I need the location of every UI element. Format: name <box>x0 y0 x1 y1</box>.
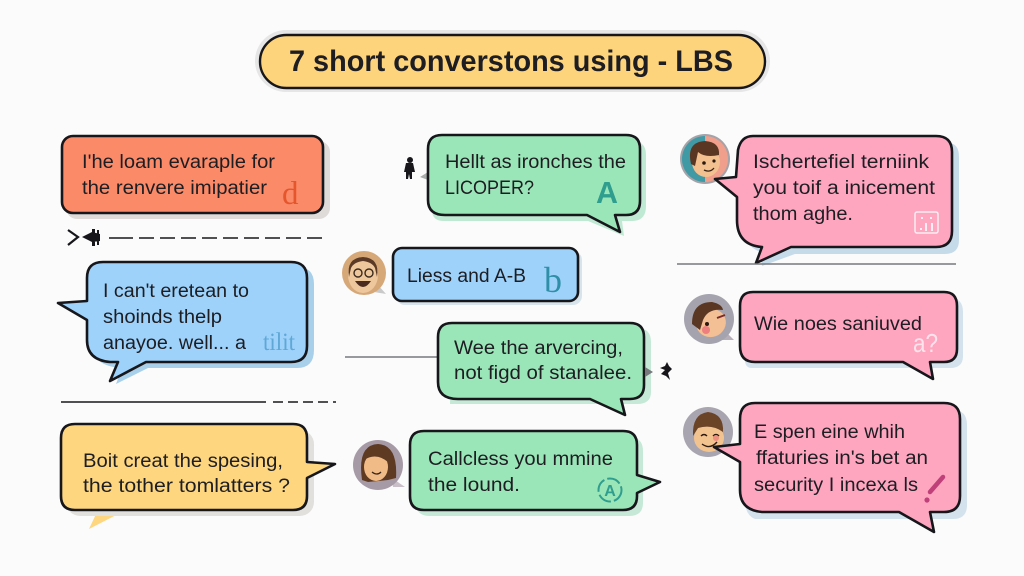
bubble shadow <box>432 141 646 236</box>
panel: pink message three <box>714 403 967 532</box>
panel: green message one: LICOPER? <box>445 178 534 199</box>
icon: circled A <box>598 478 622 502</box>
bubble <box>410 431 660 510</box>
panel: pink message three: E spen eine whih <box>754 422 905 443</box>
panel: blue message: anayoe. well... a <box>103 333 246 354</box>
panel: blue short message: b <box>544 260 562 300</box>
panel: orange message: I'he loam evaraple for <box>82 152 276 173</box>
panel: yellow message <box>61 424 335 529</box>
panel: yellow message: the tother tomlatters ? <box>83 476 290 497</box>
icon: small figure right <box>645 362 672 380</box>
panel: pink message three: ffaturies in's bet an <box>756 448 928 469</box>
panel: pink message one: thom aghe. <box>753 204 853 225</box>
connector line <box>345 356 438 358</box>
panel: orange message <box>62 136 330 219</box>
icon: avatar smiling <box>683 407 733 457</box>
icon: woman avatar <box>353 440 405 490</box>
divider <box>61 401 336 403</box>
title: 7 short converstons using - LBS <box>289 45 733 78</box>
bubble shadow <box>92 267 314 384</box>
panel: blue short message <box>393 248 582 305</box>
panel: orange message: the renvere imipatier <box>82 178 268 199</box>
panel: green message two: Wee the arvercing, <box>454 338 623 359</box>
icon: bald man avatar <box>342 251 386 295</box>
divider with arrow icon <box>68 229 327 246</box>
panel: orange message: d <box>282 176 299 212</box>
panel: green message two: not figd of stanalee. <box>454 363 632 384</box>
panel: blue short message: Liess and A-B <box>407 266 526 287</box>
bubble <box>740 292 957 379</box>
icon: avatar boy <box>680 134 730 184</box>
divider <box>677 263 956 265</box>
panel: pink message one: Ischertefiel terniink <box>753 152 930 173</box>
bubble shadow <box>745 143 959 266</box>
panel: yellow message: Boit creat the spesing, <box>83 451 283 472</box>
panel: green message three <box>410 431 660 516</box>
panel: blue message: tilit <box>263 329 295 356</box>
panel: blue message: I can't eretean to <box>103 281 249 302</box>
tail bottom <box>89 512 122 529</box>
panel: green message two <box>438 323 651 415</box>
panel: pink message two: a? <box>913 328 938 358</box>
icon: pink slash mark <box>924 477 943 503</box>
bubble <box>58 262 307 381</box>
title <box>255 30 770 92</box>
panel: pink message one: you toif a inicement <box>753 178 936 199</box>
panel: pink message two: Wie noes saniuved <box>754 314 922 335</box>
bubble <box>428 135 640 232</box>
panel: green message three: Callcless you mmine <box>428 449 613 470</box>
panel: pink message one <box>715 136 959 266</box>
bubble <box>61 424 335 510</box>
bubble <box>715 136 952 263</box>
icon: circled A: A <box>604 483 616 500</box>
panel: blue message: shoinds thelp <box>103 307 222 328</box>
panel: green message three: the lound. <box>428 475 520 496</box>
bubble <box>438 323 644 415</box>
panel: pink message two <box>740 292 963 379</box>
bubble <box>714 403 960 532</box>
panel: green message one <box>420 135 646 236</box>
icon: avatar blush <box>684 294 734 344</box>
icon: small chart <box>915 212 938 233</box>
panel: green message one: A <box>596 175 618 210</box>
panel: green message one: Hellt as ironches the <box>445 152 626 173</box>
panel: blue message <box>58 262 314 384</box>
panel: pink message three: security I incexa ls <box>754 475 918 496</box>
icon: small figure left <box>404 157 415 179</box>
